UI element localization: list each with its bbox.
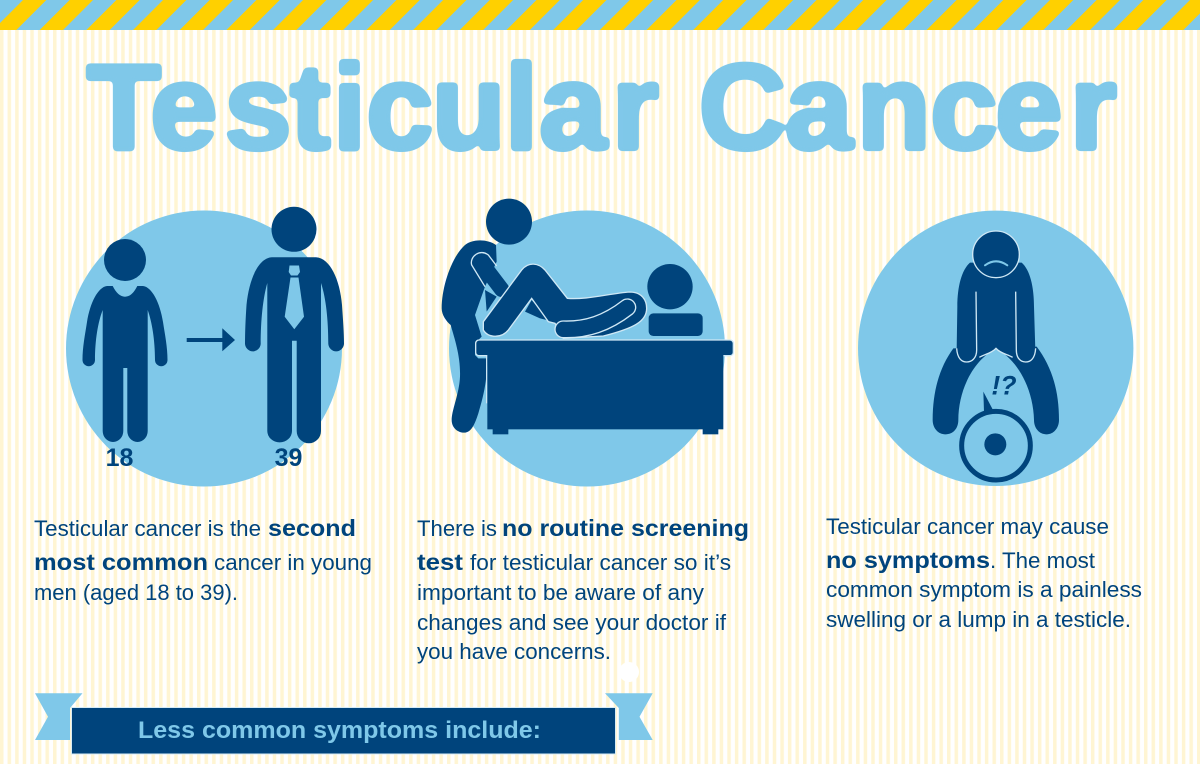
background circle: examination xyxy=(449,210,725,486)
speech tail xyxy=(983,392,993,412)
legs xyxy=(933,347,1059,434)
torso and arms xyxy=(957,263,1035,362)
ribbon bar xyxy=(72,708,616,754)
smudge xyxy=(619,662,639,682)
examination table xyxy=(476,340,733,434)
sad mouth xyxy=(985,261,1007,265)
text: second most common: men (aged 18 to 39). xyxy=(34,580,238,605)
lump dot xyxy=(984,433,1006,455)
patient xyxy=(483,264,703,338)
text: no symptoms: no symptoms xyxy=(826,547,990,573)
head xyxy=(973,231,1019,278)
text: second most common: second xyxy=(268,515,356,541)
text: second most common: most common xyxy=(34,549,208,575)
background circle: symptoms xyxy=(858,211,1133,486)
icon: man aged 39 with tie xyxy=(245,207,344,443)
background circle: age range xyxy=(66,210,342,486)
text: no routine screening: for testicular cancer so it’s xyxy=(470,550,731,575)
ribbon left tail xyxy=(35,693,82,740)
icon: young man aged 18 xyxy=(82,239,168,442)
ribbon banner xyxy=(35,693,653,754)
top striped band xyxy=(0,0,1200,30)
ribbon right tail xyxy=(605,693,653,740)
panel: age range xyxy=(66,207,344,487)
text: no symptoms: Testicular cancer may cause xyxy=(826,514,1109,539)
question marks: !? xyxy=(991,371,1017,401)
text: no routine screening: important to be aware of any xyxy=(417,580,705,605)
text: second most common xyxy=(34,515,372,605)
text: no symptoms: common symptom is a painless xyxy=(826,577,1142,602)
doctor xyxy=(442,199,532,433)
label: age 39: 39 xyxy=(275,444,302,472)
arrow: age progression xyxy=(187,328,235,351)
label: age 18: 18 xyxy=(106,444,133,472)
title: Testicular Cancer xyxy=(0,39,1117,175)
ribbon heading: Less common symptoms include: xyxy=(138,717,541,744)
icon: doctor examining patient xyxy=(442,199,733,434)
text: no routine screening: There is xyxy=(417,516,497,541)
text: no routine screening: no routine screening xyxy=(502,515,749,541)
text: no routine screening: test xyxy=(417,549,463,575)
text: no routine screening: you have concerns. xyxy=(417,639,611,664)
text: no symptoms xyxy=(826,514,1142,632)
panel: examination xyxy=(442,199,733,487)
lump callout ring xyxy=(962,411,1030,480)
arm outlines xyxy=(957,292,1036,362)
text: no routine screening xyxy=(417,515,749,664)
text: second most common: cancer in young xyxy=(214,550,372,575)
text: no symptoms: . The most xyxy=(990,548,1096,573)
icon: worried man looking down xyxy=(933,231,1059,480)
text: no routine screening: changes and see your doctor if xyxy=(417,610,727,635)
text: no symptoms: swelling or a lump in a testicle. xyxy=(826,607,1131,632)
text: second most common: Testicular cancer is the xyxy=(34,516,261,541)
panel: symptoms xyxy=(858,211,1133,486)
